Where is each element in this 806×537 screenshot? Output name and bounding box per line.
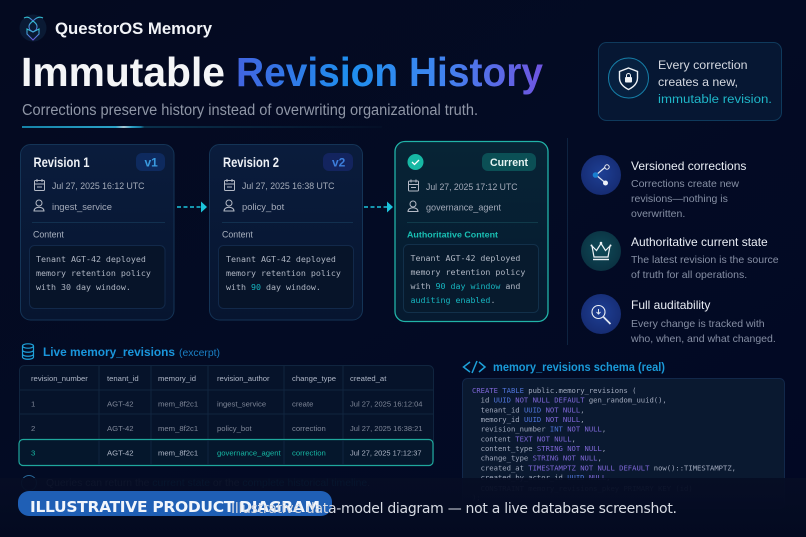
table row 3 highlighted: correction bbox=[292, 448, 326, 458]
note: query modes bbox=[22, 476, 370, 490]
content box: memory retention policy bbox=[410, 267, 525, 277]
content box: Tenant AGT-42 deployed bbox=[36, 254, 146, 264]
table row 2: mem_8f2c1 bbox=[158, 424, 198, 433]
heading: live memory_revisions bbox=[22, 344, 220, 359]
icon: calendar bbox=[224, 179, 234, 190]
benefit: full auditability: Full auditability bbox=[631, 298, 710, 312]
heading: revision 2: Revision 2 bbox=[223, 155, 279, 170]
icon: calendar bbox=[408, 180, 418, 191]
content box: with 90 day window. bbox=[226, 282, 321, 292]
icon: crown bbox=[581, 231, 621, 271]
title bbox=[21, 49, 543, 95]
callout: every correction bbox=[598, 42, 782, 120]
badge: illustrative product diagram bbox=[18, 491, 332, 516]
table row 2 bbox=[31, 424, 422, 433]
table row 2: policy_bot bbox=[217, 424, 252, 433]
benefit: versioned corrections: Versioned corrections bbox=[631, 159, 746, 173]
code panel: schema: id UUID NOT NULL DEFAULT gen_random_uuid(), bbox=[472, 396, 667, 405]
table row 1: create bbox=[292, 400, 313, 408]
table row 2: AGT-42 bbox=[107, 424, 134, 433]
content label: Content bbox=[33, 230, 64, 240]
icon: QuestorOS logo bbox=[20, 14, 46, 42]
code panel: schema bbox=[462, 378, 784, 508]
heading: live memory_revisions: Live memory_revisions bbox=[43, 345, 175, 359]
code panel: schema: created_by_actor_id UUID NULL, bbox=[472, 473, 610, 482]
table row 3 highlighted: mem_8f2c1 bbox=[158, 448, 198, 458]
arrow: revision 1 to 2 bbox=[177, 202, 207, 212]
code panel: schema: revision_number INT NOT NULL, bbox=[472, 425, 606, 434]
title underline bbox=[22, 126, 382, 128]
table row 1 bbox=[31, 400, 423, 408]
title: Revision History bbox=[236, 49, 543, 95]
icon: database bbox=[22, 344, 34, 359]
brand name: QuestorOS Memory bbox=[55, 19, 213, 38]
icon: calendar bbox=[34, 179, 44, 190]
header: logo and brand bbox=[20, 14, 213, 42]
benefit: authoritative current state: The latest revision is the source bbox=[631, 254, 779, 266]
table row 3 highlighted: governance_agent bbox=[217, 448, 282, 458]
table row 3 highlighted: AGT-42 bbox=[107, 448, 134, 458]
content box: memory retention policy bbox=[226, 268, 341, 278]
panel: revision 2 bbox=[210, 144, 362, 320]
title: Immutable bbox=[21, 49, 225, 95]
table row 2: correction bbox=[292, 424, 326, 433]
table row 1: mem_8f2c1 bbox=[158, 400, 198, 408]
badge: v1: v1 bbox=[144, 156, 158, 170]
table row 2: 2 bbox=[31, 424, 35, 433]
benefit: authoritative current state: of truth for all operations. bbox=[631, 269, 747, 281]
heading: live memory_revisions: (excerpt) bbox=[179, 348, 220, 359]
callout: every correction: immutable revision. bbox=[658, 92, 772, 106]
table row 3 highlighted bbox=[19, 440, 433, 466]
code panel: schema: memory_id UUID NOT NULL, bbox=[472, 415, 585, 424]
table header: tenant_id bbox=[107, 374, 139, 383]
date: Jul 27, 2025 16:38 UTC bbox=[242, 180, 335, 191]
content box bbox=[404, 244, 538, 312]
badge: illustrative product diagram: ILLUSTRATIVE PRODUCT DIAGRAM bbox=[30, 498, 320, 516]
benefit: versioned corrections: revisions—nothing is bbox=[631, 193, 728, 205]
content box: with 30 day window. bbox=[36, 282, 131, 292]
callout: every correction: creates a new, bbox=[658, 75, 738, 89]
author: governance_agent bbox=[426, 202, 501, 212]
code panel: schema: content_type STRING NOT NULL, bbox=[472, 444, 606, 453]
panel: current revision bbox=[395, 142, 548, 322]
code panel: schema: CREATE TABLE public.memory_revisions ( bbox=[472, 386, 636, 395]
arrow: revision 2 to current bbox=[364, 202, 393, 212]
date: Jul 27, 2025 16:12 UTC bbox=[52, 180, 145, 191]
benefit: full auditability bbox=[581, 294, 776, 345]
content label: Content bbox=[222, 230, 253, 240]
heading: schema: memory_revisions schema (real) bbox=[493, 361, 665, 374]
content box: auditing enabled. bbox=[410, 295, 495, 305]
benefit: full auditability: who, when, and what changed. bbox=[630, 333, 776, 345]
icon: code brackets bbox=[464, 361, 485, 373]
badge: current: Current bbox=[490, 157, 528, 169]
icon: share nodes bbox=[581, 155, 621, 195]
benefit: authoritative current state bbox=[581, 231, 779, 281]
badge: v2: v2 bbox=[332, 156, 346, 170]
authoritative content label: Authoritative Content bbox=[407, 230, 498, 240]
heading: revision 1: Revision 1 bbox=[34, 155, 90, 170]
icon: check badge bbox=[408, 154, 424, 170]
table row 1: ingest_service bbox=[217, 400, 266, 408]
benefit: versioned corrections: Corrections create new bbox=[631, 178, 739, 190]
table: memory revisions bbox=[19, 366, 434, 466]
benefit: versioned corrections bbox=[581, 155, 746, 220]
benefit: full auditability: Every change is tracked with bbox=[631, 318, 765, 330]
subtitle: Corrections preserve history instead of overwriting organizational truth. bbox=[22, 102, 478, 119]
icon: user bbox=[408, 201, 418, 212]
note: query modes: Queries can return the current state or the complete historical timeline. bbox=[46, 478, 370, 489]
code panel: schema: content TEXT NOT NULL, bbox=[472, 434, 576, 443]
table header: revision_author bbox=[217, 374, 270, 383]
caption: Illustrative data-model diagram — not a live database screenshot. bbox=[231, 501, 677, 517]
table row 1: AGT-42 bbox=[107, 400, 134, 408]
table row 1: 1 bbox=[31, 400, 35, 408]
content box: Tenant AGT-42 deployed bbox=[226, 254, 336, 264]
table header: change_type bbox=[292, 374, 336, 383]
icon: user bbox=[34, 200, 44, 211]
icon: shield with lock bbox=[608, 58, 648, 98]
content box bbox=[30, 246, 165, 308]
content box: Tenant AGT-42 deployed bbox=[410, 253, 520, 263]
benefit: authoritative current state: Authoritative current state bbox=[631, 235, 768, 249]
benefit: versioned corrections: overwritten. bbox=[631, 208, 685, 220]
icon: magnifier bbox=[581, 294, 621, 334]
author: policy_bot bbox=[242, 201, 285, 212]
badge: v2 bbox=[323, 153, 353, 171]
code panel: schema: CONSTRAINT memory_revisions_pkey PRIMARY KEY (id) bbox=[472, 484, 693, 493]
code panel: schema: ); bbox=[472, 493, 481, 502]
table row 2: Jul 27, 2025 16:38:21 bbox=[350, 424, 422, 433]
table header: memory_id bbox=[158, 374, 196, 383]
badge: current bbox=[482, 153, 536, 171]
table header: revision_number bbox=[31, 374, 88, 383]
badge: v1 bbox=[136, 153, 165, 171]
bottom overlay band bbox=[0, 478, 806, 537]
icon: user bbox=[224, 200, 234, 211]
content box bbox=[218, 246, 354, 308]
table header: created_at bbox=[350, 374, 387, 383]
author: ingest_service bbox=[52, 201, 112, 212]
code panel: schema: created_at TIMESTAMPTZ NOT NULL DEFAULT now()::TIMESTAMPTZ, bbox=[472, 463, 736, 472]
content box: with 90 day window and bbox=[410, 281, 520, 291]
content box: memory retention policy bbox=[36, 268, 151, 278]
table row 3 highlighted: Jul 27, 2025 17:12:37 bbox=[350, 448, 422, 458]
table row 1: Jul 27, 2025 16:12:04 bbox=[350, 400, 423, 408]
code panel: schema: tenant_id UUID NOT NULL, bbox=[472, 405, 585, 414]
callout: every correction: Every correction bbox=[658, 58, 748, 72]
date: Jul 27, 2025 17:12 UTC bbox=[426, 181, 518, 192]
table header bbox=[31, 374, 387, 383]
table row 3 highlighted: 3 bbox=[31, 448, 35, 458]
panel: revision 1 bbox=[20, 144, 174, 320]
code panel: schema: change_type STRING NOT NULL, bbox=[472, 454, 602, 463]
